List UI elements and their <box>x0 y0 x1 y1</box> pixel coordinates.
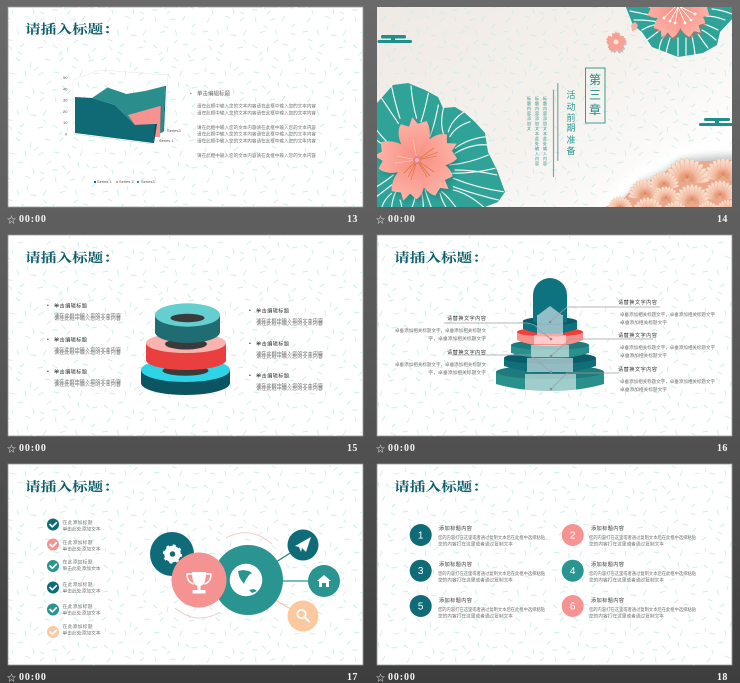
list item 5 <box>410 595 545 620</box>
heading: slide 18 title: 请插入标题： <box>394 479 488 494</box>
small vertical text columns: 文 <box>543 125 547 131</box>
list item 5: 添加标题内容 <box>439 596 472 604</box>
icon: gear <box>150 532 194 576</box>
chapter subtitle vertical: 活 <box>566 89 576 100</box>
footer: slide 17: ☆ <box>7 673 16 683</box>
panel: slide 15 stacked rings <box>8 235 363 436</box>
small vertical text columns: 容 <box>527 110 531 116</box>
icon: trophy <box>172 552 226 608</box>
small vertical text columns: 内 <box>543 155 547 161</box>
text blocks: right column: 请在此框中输入您的文本内容 <box>256 385 323 392</box>
diagram: connected circles <box>150 530 340 632</box>
list item 2: 添加标题内容 <box>591 524 624 532</box>
chapter subtitle vertical: 准 <box>566 135 576 145</box>
footer: slide 14: 14 <box>717 214 728 225</box>
checklist: 在此添加标题 <box>62 558 93 566</box>
list item 4: 您的内容打在这里或者通过复制文本后在此框中选择粘贴 <box>589 570 696 577</box>
text blocks: left column: 请在此框中输入您的文本内容 <box>54 315 121 322</box>
text blocks: left column: 请在此框中输入您的文本内容 <box>54 312 121 319</box>
footer: slide 16: 16 <box>717 443 728 454</box>
small vertical text columns: 此 <box>535 135 539 141</box>
list item 3 <box>410 560 545 584</box>
list item 6: 您的内容打在这里或者通过复制文本后在此框中选择粘贴 <box>589 606 696 613</box>
heading: slide 17 title: 请插入标题： <box>25 479 119 494</box>
icon: globe circle <box>213 545 283 615</box>
text block: slide 13 description: 请在此框中输入您的文本内容请在此框中输入您的文本内容 <box>197 124 316 131</box>
chart: stacked 3D rings <box>141 303 230 395</box>
chart: tiered pyramid <box>496 278 604 392</box>
footer: slide 16: ☆ <box>376 444 385 454</box>
text blocks: right labels: 请替换文字内容 <box>618 365 657 373</box>
text blocks: right column: 单击编辑标题 <box>256 372 289 380</box>
text blocks: right column: • <box>249 308 251 314</box>
small vertical text columns: 标 <box>535 95 539 101</box>
illustration: left cherry blossom <box>377 117 462 203</box>
text block: slide 13 description: • <box>190 92 192 97</box>
list item 2 <box>562 524 696 548</box>
small vertical text columns: 加 <box>527 120 531 126</box>
checklist: 单击此处添加文本 <box>62 546 101 552</box>
illustration: left lotus leaf <box>377 83 505 208</box>
illustration: top right cherry blossom <box>648 7 710 40</box>
center arrow overlay <box>525 306 576 392</box>
footer: slide 13: 13 <box>347 214 358 225</box>
footer: slide 18 <box>376 672 728 683</box>
small vertical text columns: 标 <box>527 95 531 101</box>
small vertical text columns: 输 <box>543 145 547 151</box>
footer: slide 14 <box>376 214 728 225</box>
tier 3 <box>511 340 589 359</box>
small vertical text columns: 容 <box>543 160 547 166</box>
panel: slide 16 pyramid <box>377 235 732 436</box>
list item 6: 6 <box>570 602 576 612</box>
chart: 3D area chart: 10 <box>63 120 68 125</box>
panel: slide 18 numbered list <box>377 464 732 665</box>
small vertical text columns: 容 <box>535 160 539 166</box>
list item 2: 您的内容打在这里或者通过复制文本 <box>589 540 664 548</box>
text blocks: left labels: 卓垂添加相关标题文字，卓垂添加相关标题文 <box>395 327 486 334</box>
text block: slide 13 description <box>190 90 316 159</box>
footer: slide 14: ☆ <box>376 215 385 225</box>
footer: slide 18: 00:00 <box>388 672 416 683</box>
list item 5: 您的内容打在这里或者通过复制文本后在此框中选择粘贴 <box>438 606 545 613</box>
list item 5: 5 <box>418 602 424 612</box>
text blocks: right column: 请在此框中输入您的文本内容 <box>256 317 323 324</box>
list item 4 <box>562 560 696 584</box>
small vertical text columns: 处 <box>535 140 539 146</box>
tier 4 <box>504 352 596 373</box>
text blocks: right labels: 卓垂添加相关标题文字 <box>620 386 667 393</box>
chapter subtitle vertical: 前 <box>566 112 576 123</box>
small vertical text columns: 题 <box>543 101 547 106</box>
checklist: 在此添加标题 <box>62 603 93 610</box>
small vertical text columns: 输 <box>535 145 539 151</box>
list item 1: 1 <box>418 530 424 542</box>
checklist: 单击此处添加文本 <box>62 630 101 636</box>
text block: slide 13 description: 请在此框中输入您的文本内容请在此框中输入您的文本内容 <box>197 152 316 159</box>
text blocks: right labels: 卓垂添加相关标题文字，卓垂添加相关标题文字 <box>620 344 715 351</box>
footer: slide 15: 00:00 <box>19 443 47 454</box>
text block: slide 13 description: 单击编辑标题 <box>197 90 230 98</box>
small vertical text columns: 入 <box>535 151 539 156</box>
footer: slide 17: 00:00 <box>19 672 47 683</box>
checklist: 单击此处添加文本 <box>62 526 101 532</box>
small vertical text columns: 题 <box>527 101 531 106</box>
list item 2: 您的内容打在这里或者通过复制文本后在此框中选择粘贴 <box>589 534 696 541</box>
chart: 3D area chart: Series3 <box>167 128 181 133</box>
list item 1 <box>410 524 545 548</box>
chapter label box: 三 <box>589 88 601 102</box>
text blocks: right labels: 请替换文字内容 <box>618 298 657 306</box>
text block: slide 13 description: 请在此框中输入您的文本内容请在此框中输入您的文本内容 <box>197 130 316 138</box>
list item 4: 4 <box>570 566 576 577</box>
checklist: 在此添加标题 <box>62 519 93 526</box>
small vertical text columns <box>527 95 547 166</box>
checklist: 单击此处添加文本 <box>62 565 101 572</box>
small vertical text columns: 添 <box>535 115 539 121</box>
small vertical text columns: 处 <box>543 140 547 146</box>
list item 6: 添加标题内容 <box>591 596 624 604</box>
text blocks: right column: 请在此框中输入您的文本内容 <box>256 382 323 389</box>
vertical divider lines <box>554 83 558 177</box>
decorative cloud right <box>699 118 733 126</box>
small vertical text columns: 容 <box>543 110 547 116</box>
illustration: small blossom <box>605 22 638 55</box>
icon: magnifier <box>288 600 318 632</box>
leader lines and markers <box>444 307 660 390</box>
text blocks: right labels <box>618 298 715 393</box>
small vertical text columns: 添 <box>543 115 547 121</box>
chart: 3D area chart: Series 1 <box>159 138 174 143</box>
chart: 3D area chart <box>63 70 181 144</box>
text blocks: left labels <box>395 314 486 376</box>
chart legend <box>94 179 155 184</box>
text blocks: right column: 单击编辑标题 <box>256 306 289 314</box>
text blocks: right column: 请在此框中输入您的文本内容 <box>256 320 323 327</box>
small vertical text columns: 文 <box>527 125 531 131</box>
text blocks: right labels: 卓垂添加相关标题文字 <box>620 319 667 326</box>
footer: slide 13 <box>7 214 358 225</box>
checklist: 在此添加标题 <box>62 623 93 630</box>
chart legend: Series 1 <box>97 179 112 184</box>
small vertical text columns: 本 <box>543 130 547 136</box>
chapter subtitle vertical: 动 <box>566 102 576 112</box>
checklist: 单击此处添加文本 <box>62 588 101 594</box>
text blocks: right column: 请在此框中输入您的文本内容 <box>256 353 323 360</box>
list item 6 <box>562 595 696 620</box>
small vertical text columns: 此 <box>543 135 547 141</box>
footer: slide 15: ☆ <box>7 444 16 454</box>
checklist: 在此添加标题 <box>62 581 93 588</box>
text block: slide 13 description: 请在此框中输入您的文本内容请在此框中输入您的文本内容 <box>197 102 316 110</box>
small vertical text columns: 入 <box>543 151 547 156</box>
panel: slide 14 chapter cover <box>377 7 732 207</box>
text block: slide 13 description: 请在此框中输入您的文本内容请在此框中输入您的文本内容 <box>197 138 316 144</box>
list item 3: 您的内容打在这里或者通过复制文本 <box>438 576 513 584</box>
text blocks: left column: 请在此框中输入您的文本内容 <box>54 349 121 356</box>
text blocks: right column: • <box>249 373 251 379</box>
small vertical text columns: 内 <box>527 105 531 111</box>
text blocks: left labels: 请替换文字内容 <box>447 314 486 322</box>
footer: slide 18: 18 <box>717 672 728 683</box>
list item 1: 添加标题内容 <box>439 524 472 532</box>
footer: slide 17: 17 <box>347 672 358 683</box>
icon: paper plane <box>288 530 318 560</box>
chapter label box <box>586 68 605 123</box>
footer: slide 15 <box>7 443 358 454</box>
chapter subtitle vertical: 期 <box>566 123 576 133</box>
list item 5: 您的内容打在这里或者通过复制文本 <box>438 612 513 620</box>
list item 1: 您的内容打在这里或者通过复制文本 <box>438 540 513 548</box>
text blocks: left column: 请在此框中输入您的文本内容 <box>54 378 121 385</box>
list item 1: 您的内容打在这里或者通过复制文本后在此框中选择粘贴 <box>438 534 545 541</box>
checklist <box>47 518 101 638</box>
chapter label box: 第 <box>589 73 601 87</box>
footer: slide 16 <box>376 443 728 454</box>
small vertical text columns: 容 <box>535 110 539 116</box>
text blocks: right labels: 卓垂添加相关标题文字 <box>620 352 667 359</box>
small vertical text columns: 本 <box>535 130 539 136</box>
chapter subtitle vertical <box>566 89 576 156</box>
heading: slide 16 title: 请插入标题： <box>394 250 488 265</box>
small vertical text columns: 题 <box>535 101 539 106</box>
chart: 3D area chart: 40 <box>63 86 68 92</box>
tier 5 <box>496 365 604 391</box>
text blocks: left column: • <box>47 369 49 375</box>
text blocks: right labels: 卓垂添加相关标题文字，卓垂添加相关标题文字 <box>620 378 715 385</box>
dome <box>533 278 567 324</box>
text blocks: left column: 单击编辑标题 <box>54 368 87 376</box>
tier 1 <box>523 317 577 334</box>
illustration: top right lotus leaf <box>625 5 733 57</box>
text blocks: left column: 请在此框中输入您的文本内容 <box>54 346 121 353</box>
small vertical text columns: 内 <box>535 105 539 111</box>
list item 4: 您的内容打在这里或者通过复制文本 <box>589 576 664 584</box>
list item 3: 您的内容打在这里或者通过复制文本后在此框中选择粘贴 <box>438 570 545 577</box>
list item 4: 添加标题内容 <box>591 560 624 568</box>
icon: house <box>308 565 340 597</box>
illustration: chrysanthemum <box>606 142 732 207</box>
chapter label box: 章 <box>589 102 601 117</box>
tier 2 <box>517 328 583 346</box>
text blocks: left labels: 卓垂添加相关标题文字，卓垂添加相关标题文 <box>395 361 486 368</box>
text block: slide 13 description: 请在此框中输入您的文本内容请在此框中输入您的文本内容 <box>197 110 316 116</box>
text blocks: left column: • <box>47 303 49 309</box>
list item 2: 2 <box>570 530 576 542</box>
footer: slide 13: 00:00 <box>19 214 47 225</box>
chart legend: Series 2 <box>119 179 134 184</box>
text blocks: right column: 单击编辑标题 <box>256 340 289 348</box>
footer: slide 14: 00:00 <box>388 214 416 225</box>
text blocks: right labels: 请替换文字内容 <box>618 331 657 339</box>
text blocks: left column: 单击编辑标题 <box>54 302 87 310</box>
text blocks: left labels: 请替换文字内容 <box>447 348 486 356</box>
text blocks: left column: 单击编辑标题 <box>54 336 87 344</box>
list item 3: 添加标题内容 <box>439 560 472 568</box>
text blocks: right column: • <box>249 341 251 347</box>
decorative cloud left <box>378 35 412 43</box>
middle ring <box>146 333 226 370</box>
small vertical text columns: 加 <box>543 120 547 126</box>
text blocks: right column <box>249 306 323 392</box>
footer: slide 13: ☆ <box>7 215 16 225</box>
text blocks: left labels: 字，卓垂添加相关标题文字 <box>428 369 486 376</box>
text blocks: left column: • <box>47 337 49 343</box>
panel: slide 17 icon diagram <box>8 464 363 665</box>
footer: slide 16: 00:00 <box>388 443 416 454</box>
small vertical text columns: 添 <box>527 115 531 121</box>
list item 3: 3 <box>418 566 424 577</box>
top ring <box>155 303 220 343</box>
small vertical text columns: 标 <box>543 95 547 101</box>
heading: slide 15 title: 请插入标题： <box>25 250 119 265</box>
chart: 3D area chart: 50 <box>63 75 68 80</box>
chart legend: Series3 <box>141 179 155 184</box>
footer: slide 15: 15 <box>347 443 358 454</box>
footer: slide 17 <box>7 672 358 683</box>
small vertical text columns: 加 <box>535 120 539 126</box>
list item 6: 您的内容打在这里或者通过复制文本 <box>589 612 664 620</box>
heading: slide 13 title: 请插入标题： <box>25 22 119 36</box>
small vertical text columns: 内 <box>543 105 547 111</box>
text blocks: left column <box>47 302 121 388</box>
chapter subtitle vertical: 备 <box>566 145 576 156</box>
text blocks: left labels: 字，卓垂添加相关标题文字 <box>428 335 486 342</box>
bottom ring <box>141 358 230 395</box>
text blocks: right column: 请在此框中输入您的文本内容 <box>256 350 323 357</box>
chart: 3D area chart: 30 <box>63 98 68 102</box>
small vertical text columns: 内 <box>535 155 539 161</box>
footer: slide 18: ☆ <box>376 673 385 683</box>
chart: 3D area chart: 20 <box>63 109 68 114</box>
chart: 3D area chart: 0 <box>65 132 68 136</box>
checklist: 在此添加标题 <box>62 539 93 546</box>
text blocks: right labels: 卓垂添加相关标题文字，卓垂添加相关标题文字 <box>620 311 715 318</box>
checklist: 单击此处添加文本 <box>62 610 101 616</box>
small vertical text columns: 文 <box>535 125 539 131</box>
panel: slide 13 area chart <box>8 7 363 207</box>
text blocks: left column: 请在此框中输入您的文本内容 <box>54 381 121 388</box>
